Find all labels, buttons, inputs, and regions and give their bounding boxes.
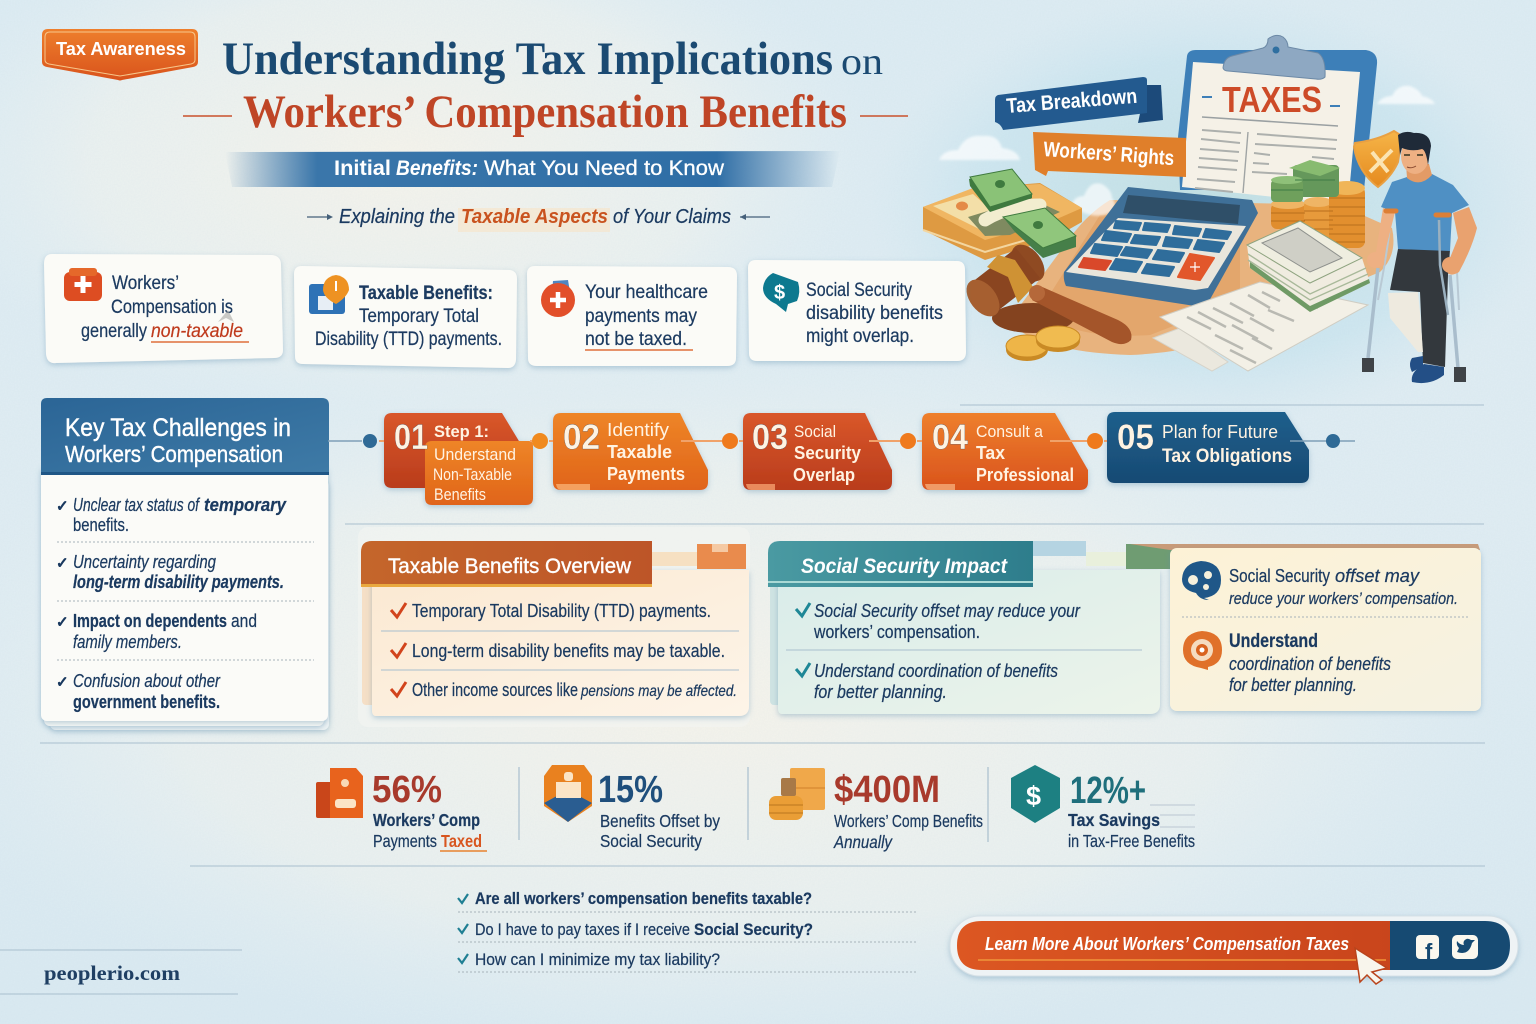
ribbon: Workers' Rights: Workers’ Rights xyxy=(1043,138,1175,170)
challenge list: temporary xyxy=(204,495,287,515)
loose papers xyxy=(1153,282,1368,371)
title xyxy=(183,33,908,138)
checklist: workers’ compensation. xyxy=(813,622,980,642)
call to action button xyxy=(950,916,1518,984)
desk base xyxy=(1008,200,1394,355)
step 01: Step 1: xyxy=(434,422,489,441)
challenge list: ✓ xyxy=(56,498,69,515)
card: healthcare: not be taxed. xyxy=(585,329,687,350)
calculator xyxy=(1064,187,1258,306)
step 04: 04 xyxy=(932,418,968,457)
shield xyxy=(1354,131,1402,187)
stat: 56%: Taxed xyxy=(441,831,482,851)
step 05: Plan for Future xyxy=(1162,422,1278,442)
ribbon: Tax Breakdown xyxy=(995,77,1163,130)
stat: $400M: $400M xyxy=(834,769,940,811)
challenge list: benefits. xyxy=(73,515,129,535)
call to action button: Learn More About Workers’ Compensation Taxes xyxy=(985,934,1349,954)
crutch shafts xyxy=(1368,268,1378,358)
checklist: Temporary Total Disability (TTD) payments. xyxy=(412,600,711,621)
step 03: Overlap xyxy=(793,465,855,485)
challenge list: ✓ xyxy=(56,674,69,691)
stat: 15%: 15% xyxy=(598,769,663,811)
step 02 xyxy=(553,413,708,490)
step 04 xyxy=(922,413,1088,490)
icon: chat bubble xyxy=(1182,561,1221,600)
icon: cursor xyxy=(1355,948,1387,984)
card: non-taxable xyxy=(44,254,283,363)
card: taxable benefits: Disability (TTD) payments. xyxy=(315,329,502,350)
panel heading: Social Security Impact xyxy=(801,555,1008,578)
stat: 15%: Social Security xyxy=(600,831,702,851)
ribbon: Tax Breakdown: Tax Breakdown xyxy=(1006,85,1138,118)
subtitle ribbon: Benefits: xyxy=(396,157,478,180)
step 03: Social xyxy=(794,422,836,441)
head xyxy=(1401,138,1429,174)
step 03 xyxy=(743,413,892,490)
panel heading xyxy=(768,541,1033,587)
stacked documents xyxy=(1247,221,1370,312)
money stack xyxy=(923,169,1082,260)
panel: social security impact xyxy=(768,541,1176,714)
panel: social security notes: coordination of benefits xyxy=(1229,654,1391,674)
icon: target bubble xyxy=(1183,631,1222,670)
hands xyxy=(1367,252,1383,268)
challenge list: ✓ xyxy=(56,614,69,631)
stat: 12%+ xyxy=(1011,765,1195,851)
icon: coin stacks xyxy=(769,768,825,820)
step 02: Taxable xyxy=(607,442,672,462)
badge: Tax Awareness xyxy=(42,29,198,80)
step 02: Identify xyxy=(607,420,669,440)
step 03: Security xyxy=(794,443,861,463)
cast xyxy=(1388,292,1423,352)
challenge list: Confusion about other xyxy=(73,671,221,691)
step 01: Benefits xyxy=(434,485,486,504)
illustration: tax desk scene xyxy=(923,35,1477,383)
clipboard: TAXES xyxy=(1222,79,1322,120)
checklist: Other income sources like xyxy=(412,679,578,700)
checklist: Understand coordination of benefits xyxy=(814,661,1058,681)
divider stats bottom xyxy=(190,865,1485,867)
icon: facebook: f xyxy=(1425,939,1433,964)
checklist xyxy=(381,600,739,700)
panel heading: Workers’ Compensation xyxy=(65,441,283,467)
stat: $400M: Workers’ Comp Benefits xyxy=(834,811,983,831)
title: on xyxy=(841,41,883,83)
divider right xyxy=(960,404,1484,406)
step 01: Non-Taxable xyxy=(433,465,512,484)
coin stacks and cash xyxy=(1271,160,1365,248)
checklist: Social Security offset may reduce your xyxy=(814,601,1081,621)
tagline: Taxable Aspects xyxy=(461,206,608,228)
step 01: Understand xyxy=(434,445,516,464)
title: Understanding Tax Implications xyxy=(222,33,833,85)
step connectors xyxy=(328,433,1355,449)
checklist: for better planning. xyxy=(814,682,947,702)
card: social security: disability benefits xyxy=(806,303,943,324)
step 02: 02 xyxy=(563,418,600,457)
tagline: Explaining the xyxy=(339,206,455,228)
step 01 xyxy=(384,413,533,505)
shoes xyxy=(1410,356,1423,372)
FAQ list: Do I have to pay taxes if I receive xyxy=(475,921,690,939)
back crutch rails xyxy=(1378,216,1459,310)
panel heading xyxy=(41,398,329,475)
stat: $400M xyxy=(769,768,983,852)
checklist xyxy=(786,601,1142,702)
neck xyxy=(1406,164,1432,182)
challenge list: Uncertainty regarding xyxy=(73,552,216,572)
challenge list: family members. xyxy=(73,632,182,652)
card: taxable benefits xyxy=(294,266,517,368)
icon: first aid xyxy=(64,268,102,301)
FAQ list xyxy=(458,890,918,972)
website footer: peoplerio.com xyxy=(44,961,181,985)
step 02: Payments xyxy=(607,464,685,484)
panel: taxable benefits overview xyxy=(358,527,750,727)
step 01: 01 xyxy=(394,418,428,457)
icon: teal hexagon xyxy=(1011,765,1060,823)
coins xyxy=(1006,339,1048,361)
trousers xyxy=(1390,249,1450,367)
stat: 15% xyxy=(544,765,720,851)
right arm xyxy=(1444,207,1477,275)
challenge list: Impact on dependents xyxy=(73,611,227,631)
divider stats top xyxy=(40,742,1485,744)
subtitle ribbon: Initial xyxy=(334,157,391,180)
icon: teal hexagon: $ xyxy=(1026,781,1041,811)
card: social security xyxy=(748,260,966,361)
panel: social security notes: Social Security xyxy=(1229,565,1331,586)
step 05: 05 xyxy=(1117,418,1154,457)
card: non-taxable: Compensation is xyxy=(111,297,233,318)
challenge list: ✓ xyxy=(56,555,69,572)
step 04: Professional xyxy=(976,465,1074,485)
left arm xyxy=(1368,208,1395,267)
card: non-taxable: Workers’ xyxy=(112,273,179,294)
cloud middle xyxy=(1072,183,1115,216)
person on crutches xyxy=(1362,132,1477,383)
challenge list: long-term disability payments. xyxy=(73,572,284,592)
panel: social security notes: Understand xyxy=(1229,631,1318,652)
panel: social security notes: reduce your workers’ compensation. xyxy=(1229,589,1458,608)
FAQ list: Social Security? xyxy=(694,921,813,939)
checklist: pensions may be affected. xyxy=(580,683,737,700)
challenge list xyxy=(56,495,314,712)
step 03: 03 xyxy=(752,418,788,457)
step 04: Tax xyxy=(976,443,1005,463)
step 04: Consult a xyxy=(976,422,1043,441)
panel heading xyxy=(361,541,652,587)
checklist: Long-term disability benefits may be taxable. xyxy=(412,640,725,661)
website footer xyxy=(0,950,242,994)
icon: dollar bubble: $ xyxy=(774,282,785,304)
badge: Tax Awareness: Tax Awareness xyxy=(56,39,186,59)
icon: twitter xyxy=(1452,935,1478,959)
stat: 12%+: Tax Savings xyxy=(1068,810,1160,830)
stat: 15%: Benefits Offset by xyxy=(600,811,720,831)
card: healthcare: Your healthcare xyxy=(585,282,708,303)
cloud left xyxy=(939,136,1020,160)
card: non-taxable: non-taxable xyxy=(151,321,243,342)
stat: 12%+: 12%+ xyxy=(1070,770,1146,812)
card: social security: Social Security xyxy=(806,280,912,301)
challenge list: government benefits. xyxy=(73,692,220,712)
divider mid xyxy=(345,523,1484,525)
tagline xyxy=(307,206,770,232)
ribbon: Workers' Rights xyxy=(1033,132,1186,177)
stat: 56% xyxy=(316,768,487,851)
subtitle ribbon xyxy=(225,151,840,187)
icon: facebook xyxy=(1416,935,1439,964)
stat: 56%: 56% xyxy=(372,769,442,811)
card: social security: might overlap. xyxy=(806,326,914,347)
tagline: of Your Claims xyxy=(613,206,731,228)
icon: orange shield xyxy=(544,765,592,822)
stat: 56%: Workers’ Comp xyxy=(373,810,480,830)
stat: 12%+: in Tax-Free Benefits xyxy=(1068,831,1195,851)
icon: medical kit xyxy=(541,280,575,317)
stat: $400M: Annually xyxy=(833,832,893,852)
gavel xyxy=(960,238,1131,361)
card: taxable benefits: Taxable Benefits: xyxy=(359,283,493,304)
icon: pin and folder xyxy=(309,275,349,314)
FAQ list: How can I minimize my tax liability? xyxy=(475,951,720,969)
panel heading: Taxable Benefits Overview xyxy=(388,555,632,578)
card: non-taxable: generally xyxy=(81,321,147,342)
panel: key tax challenges xyxy=(41,398,329,730)
challenge list: and xyxy=(231,611,257,631)
clipboard xyxy=(1178,35,1377,205)
challenge list: Unclear tax status of xyxy=(73,495,201,515)
step 05 xyxy=(1107,412,1309,483)
icon: orange folder xyxy=(316,768,363,818)
card: healthcare xyxy=(527,266,737,366)
panel: social security notes: offset may xyxy=(1335,566,1420,586)
subtitle ribbon: What You Need to Know xyxy=(484,157,725,180)
title: Workers’ Compensation Benefits xyxy=(243,86,847,138)
step 05: Tax Obligations xyxy=(1162,446,1292,467)
icon: dollar bubble xyxy=(763,273,799,312)
panel: social security notes xyxy=(1130,544,1481,711)
panel: social security notes: for better planning. xyxy=(1229,675,1357,695)
shirt xyxy=(1381,174,1469,251)
card: healthcare: payments may xyxy=(585,306,697,327)
card: taxable benefits: Temporary Total xyxy=(359,306,479,327)
FAQ list: Are all workers’ compensation benefits taxable? xyxy=(475,890,812,908)
cloud right xyxy=(1377,86,1435,104)
stat: 56%: Payments xyxy=(373,831,437,851)
panel heading: Key Tax Challenges in xyxy=(65,414,291,442)
